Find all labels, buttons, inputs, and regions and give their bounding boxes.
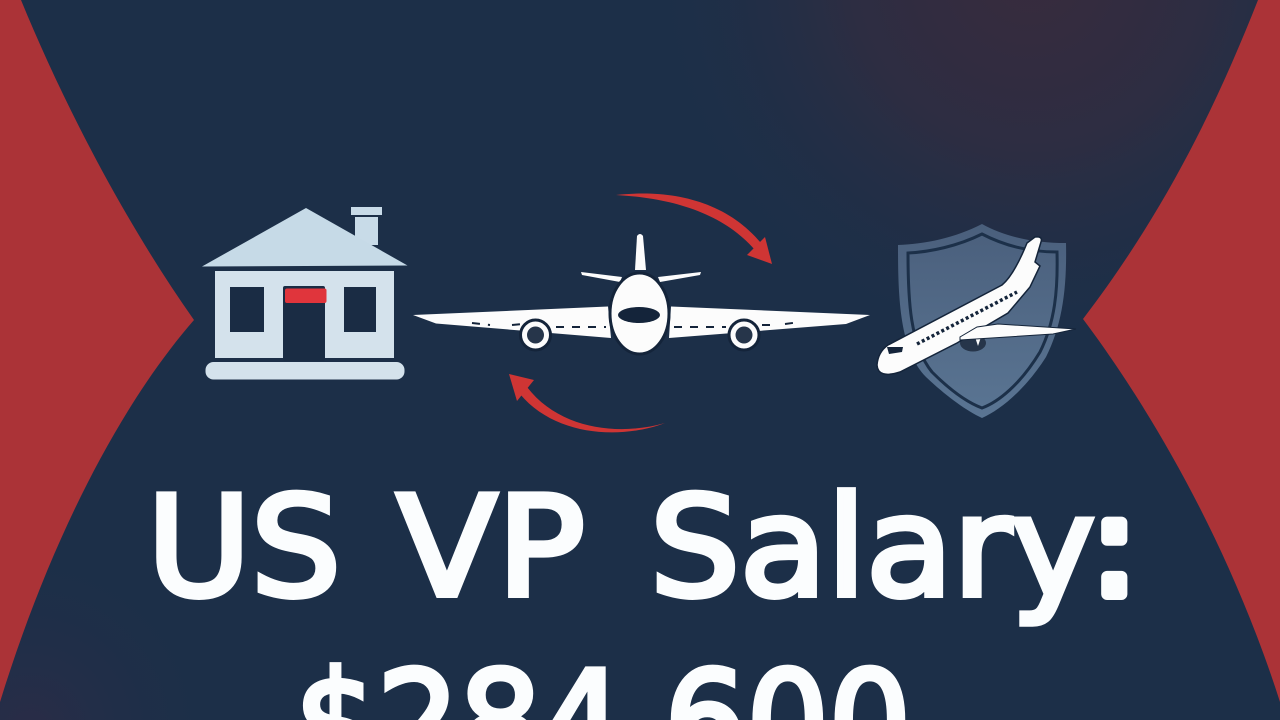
panel: left red shape — [0, 0, 194, 702]
title: US — [147, 467, 341, 628]
title: VP — [397, 467, 585, 628]
icon: shield with airplane — [877, 224, 1076, 418]
arrow: upper red curved arrow — [616, 193, 772, 264]
panel: right red shape — [1083, 0, 1280, 702]
arrow: lower red curved arrow — [509, 374, 665, 432]
icon: front-view airplane — [413, 234, 870, 354]
title — [147, 466, 1138, 628]
title: : — [1091, 466, 1138, 627]
icon: house — [202, 207, 408, 380]
title: Salary — [650, 467, 1095, 628]
